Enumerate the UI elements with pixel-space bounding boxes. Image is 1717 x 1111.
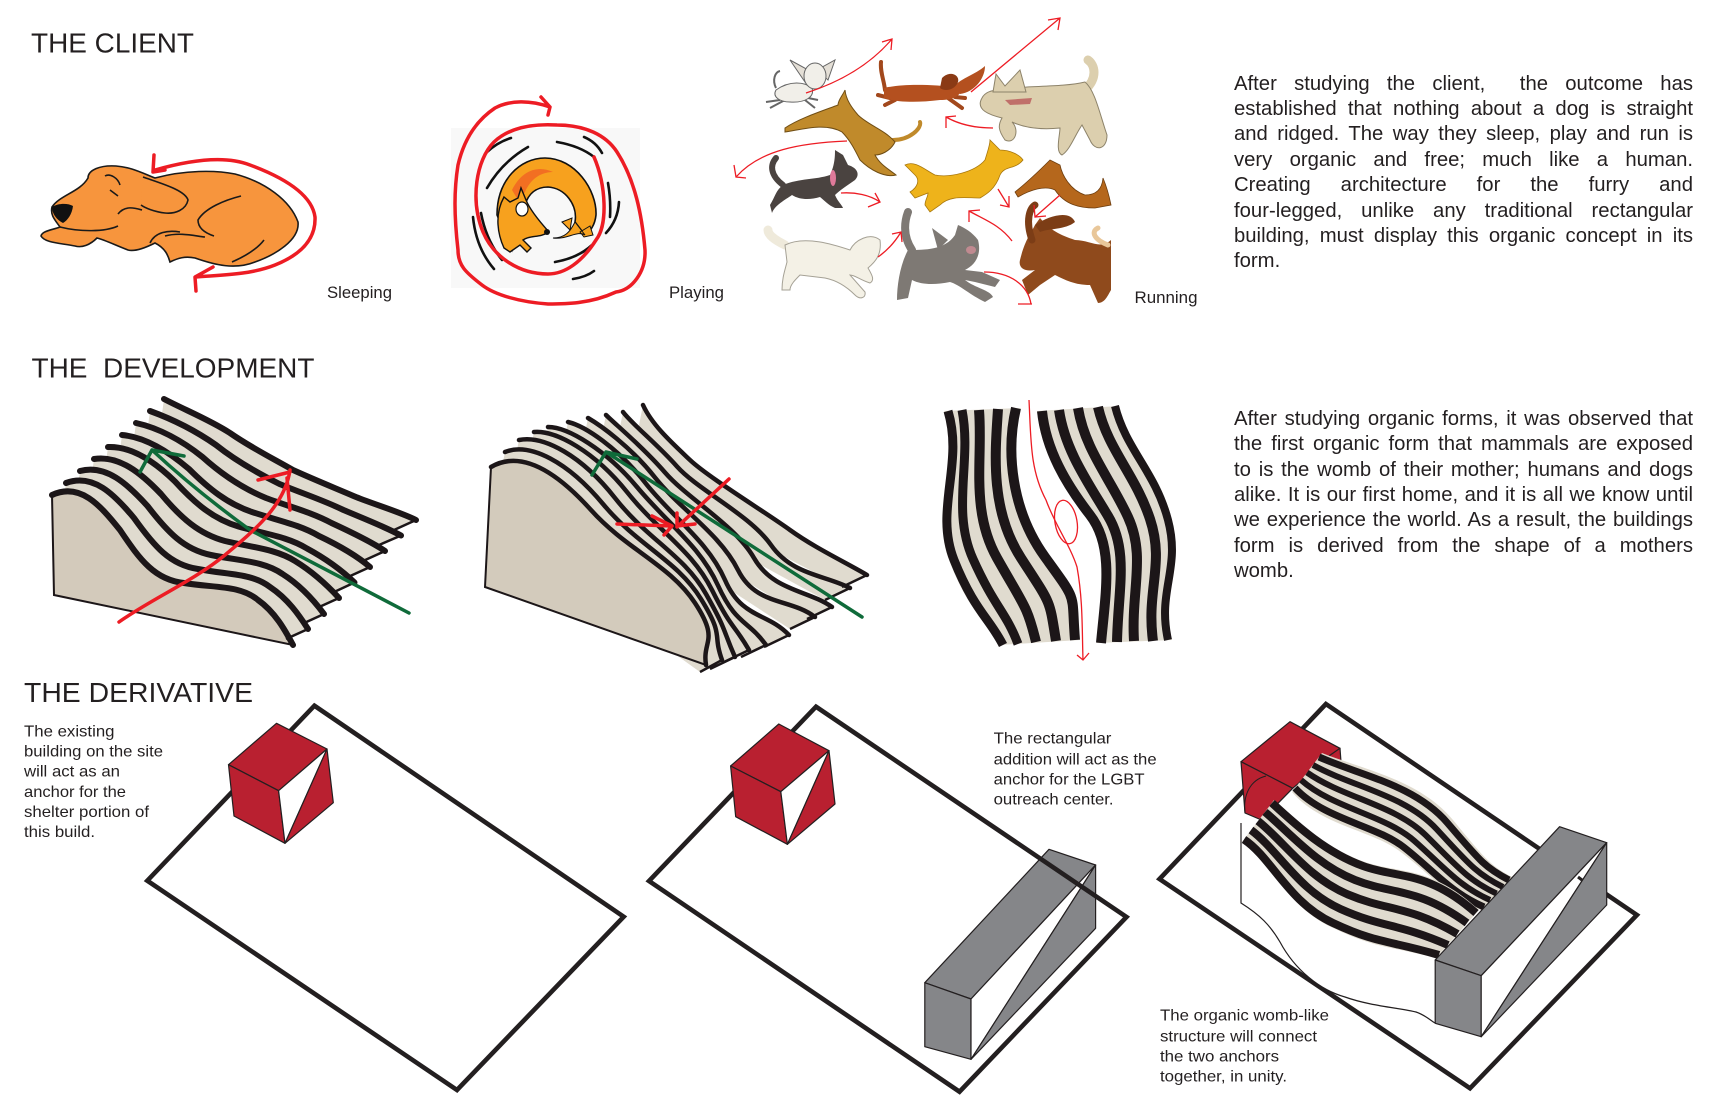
dog: dark terrier bbox=[770, 150, 858, 213]
text block: client paragraph bbox=[1234, 72, 1693, 272]
arrows: red pinch bbox=[617, 479, 729, 535]
text block: development paragraph: to is the womb of their mother; humans and dogs bbox=[1234, 458, 1693, 480]
heading: the development: THE DEVELOPMENT bbox=[32, 353, 314, 384]
text block: development paragraph: the first organic form that mammals are exposed bbox=[1234, 433, 1693, 455]
illustration: sleeping dog with red arrow bbox=[41, 155, 315, 291]
text block: client paragraph: Creating architecture for the furry and bbox=[1234, 174, 1693, 196]
illustration: playing dog curled in red spiral bbox=[451, 97, 645, 304]
red cube: existing building bbox=[731, 724, 835, 844]
dog: white poodle bbox=[768, 230, 880, 298]
white organic volume bbox=[1241, 800, 1435, 1023]
arrow: green axis bbox=[140, 450, 409, 613]
label: sleeping: Sleeping bbox=[327, 284, 392, 302]
dog: cream dog bbox=[980, 60, 1107, 155]
arrow: green axis bbox=[592, 452, 862, 617]
caption: existing building: The existing bbox=[24, 724, 114, 741]
caption: organic structure: structure will connect bbox=[1160, 1029, 1318, 1046]
text block: development paragraph: alike. It is our first home, and it is all we know until bbox=[1234, 484, 1693, 506]
text block: client paragraph: building, must display this organic concept in its bbox=[1234, 225, 1693, 247]
model: striped form one with arrows bbox=[52, 399, 416, 645]
dog: red dachshund bbox=[878, 62, 985, 108]
text block: client paragraph: form. bbox=[1234, 250, 1280, 272]
text block: development paragraph: womb. bbox=[1234, 560, 1294, 582]
diagram: site with organic womb-like connector bbox=[1160, 704, 1637, 1088]
dog: long golden dog bbox=[785, 90, 920, 176]
red cube: existing building bbox=[228, 723, 333, 843]
text block: client paragraph: four-legged, unlike any traditional rectangular bbox=[1234, 200, 1693, 222]
text block: development paragraph: we experience the world. As a result, the buildings bbox=[1234, 509, 1693, 531]
caption: existing building: building on the site bbox=[24, 744, 163, 761]
caption: existing building: will act as an bbox=[23, 764, 120, 781]
label: running: Running bbox=[1134, 289, 1198, 307]
text block: client paragraph: very organic and free; much like a human. bbox=[1234, 149, 1693, 171]
dog: white chihuahua bbox=[766, 60, 835, 108]
caption: organic structure bbox=[1160, 1008, 1329, 1086]
heading: the derivative: THE DERIVATIVE bbox=[24, 677, 253, 708]
diagram: site with rectangular addition bbox=[649, 707, 1126, 1092]
upper stripe band bbox=[1292, 753, 1512, 910]
heading: the client: THE CLIENT bbox=[31, 28, 194, 59]
caption: existing building: anchor for the bbox=[24, 784, 126, 801]
red path line and circle bbox=[1029, 400, 1089, 660]
grey block: rectangular addition bbox=[925, 849, 1096, 1059]
caption: existing building: shelter portion of bbox=[24, 804, 150, 821]
caption: rectangular addition bbox=[994, 730, 1157, 808]
dog: small brown dachshund bbox=[1015, 160, 1111, 208]
right stripe band bbox=[1037, 406, 1175, 643]
model: plan of split striped form with red path bbox=[943, 400, 1175, 660]
red motion arrows bbox=[734, 18, 1060, 304]
caption: rectangular addition: addition will act as the bbox=[994, 751, 1157, 768]
caption: organic structure: together, in unity. bbox=[1160, 1069, 1287, 1086]
text block: development paragraph: form is derived from the shape of a mothers bbox=[1234, 535, 1693, 557]
arrow: red curve bbox=[119, 470, 290, 622]
lower stripe band bbox=[1242, 800, 1479, 958]
text block: development paragraph: After studying organic forms, it was observed that bbox=[1234, 408, 1693, 430]
illustration: running dogs with red arrows bbox=[734, 18, 1111, 304]
text block: client paragraph: After studying the client, the outcome has bbox=[1234, 72, 1693, 94]
caption: rectangular addition: anchor for the LGBT bbox=[994, 771, 1145, 788]
grey block: rectangular addition bbox=[1435, 827, 1607, 1037]
text block: development paragraph bbox=[1234, 408, 1693, 582]
left stripe band bbox=[943, 408, 1080, 645]
volume outline bbox=[1241, 823, 1435, 1023]
caption: organic structure: The organic womb-like bbox=[1160, 1008, 1329, 1025]
caption: organic structure: the two anchors bbox=[1160, 1049, 1279, 1066]
red cube: existing building bbox=[1241, 722, 1341, 820]
caption: existing building bbox=[23, 724, 163, 841]
caption: existing building: this build. bbox=[24, 824, 95, 841]
dog: yellow dog bbox=[905, 140, 1023, 212]
diagram: site with existing building bbox=[147, 706, 624, 1090]
caption: rectangular addition: The rectangular bbox=[994, 730, 1112, 747]
dog: large brown dog bbox=[1020, 205, 1111, 303]
model: striped form two with pinch arrows bbox=[485, 405, 867, 672]
dog: grey dog bbox=[897, 212, 1000, 302]
text block: client paragraph: established that nothing about a dog is straight bbox=[1234, 98, 1693, 120]
label: playing: Playing bbox=[669, 284, 724, 302]
caption: rectangular addition: outreach center. bbox=[994, 791, 1114, 808]
text block: client paragraph: and ridged. The way they sleep, play and run is bbox=[1234, 123, 1693, 145]
